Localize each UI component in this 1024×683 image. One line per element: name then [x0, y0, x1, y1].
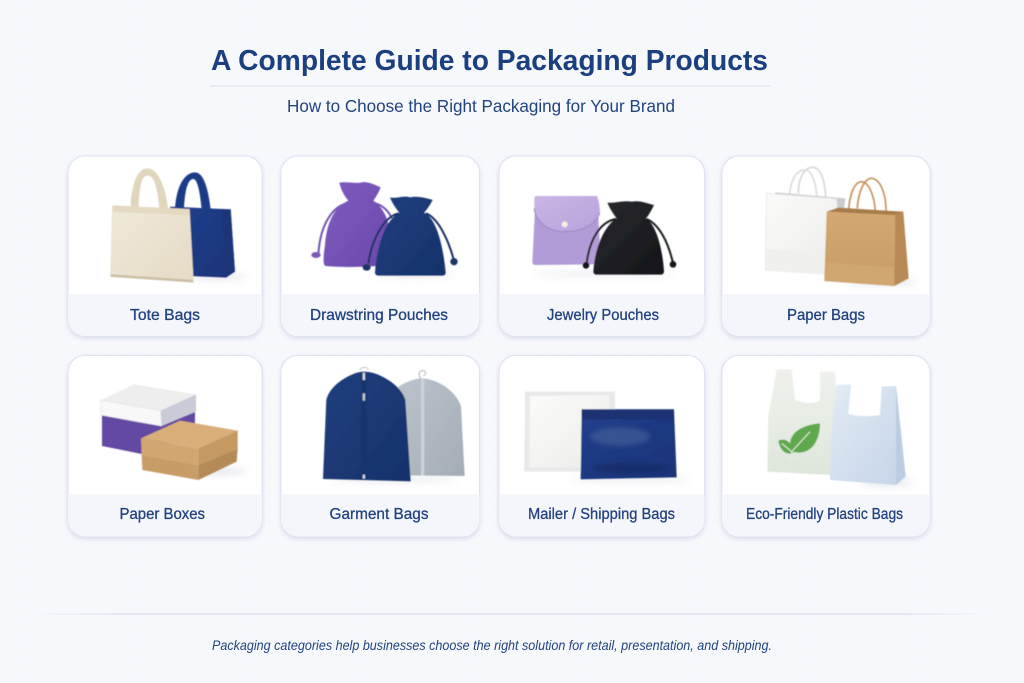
icon: leaf: [778, 423, 820, 461]
icon: paper bags: [765, 167, 917, 286]
label: Mailer / Shipping Bags: Mailer / Shipping Bags: [528, 506, 675, 523]
panel: Paper Bags: [722, 156, 930, 337]
panel: Jewelry Pouches: [499, 156, 704, 337]
label: Tote Bags: Tote Bags: [130, 307, 200, 324]
panel: Drawstring Pouches: [281, 156, 480, 337]
panel: Tote Bags: [68, 156, 262, 337]
subtitle: How to Choose the Right Packaging for Your Brand: [287, 96, 675, 116]
label: Garment Bags: Garment Bags: [330, 506, 428, 523]
label: Drawstring Pouches: Drawstring Pouches: [310, 307, 448, 324]
icon: paper boxes: [101, 384, 247, 480]
label: Paper Bags: Paper Bags: [787, 307, 865, 324]
label: Jewelry Pouches: Jewelry Pouches: [547, 307, 659, 324]
icon: tote bags: [111, 168, 247, 282]
panel: Paper Boxes: [68, 356, 262, 538]
panel: Mailer / Shipping Bags: [499, 356, 704, 538]
panel: Garment Bags: [281, 356, 480, 538]
title: A Complete Guide to Packaging Products: [211, 45, 768, 77]
icon: mailer bags: [524, 392, 690, 481]
icon: jewelry pouches: [532, 196, 676, 276]
footer note: Packaging categories help businesses choose the right solution for retail, presentation, and shipping.: [212, 637, 772, 653]
icon: drawstring pouches: [311, 182, 458, 276]
label: Eco-Friendly Plastic Bags: Eco-Friendly Plastic Bags: [746, 506, 903, 523]
panel: Eco-Friendly Plastic Bags: [722, 356, 930, 538]
icon: eco-friendly plastic bags: [767, 369, 913, 485]
icon: garment bags: [323, 367, 465, 481]
label: Paper Boxes: Paper Boxes: [120, 506, 205, 523]
